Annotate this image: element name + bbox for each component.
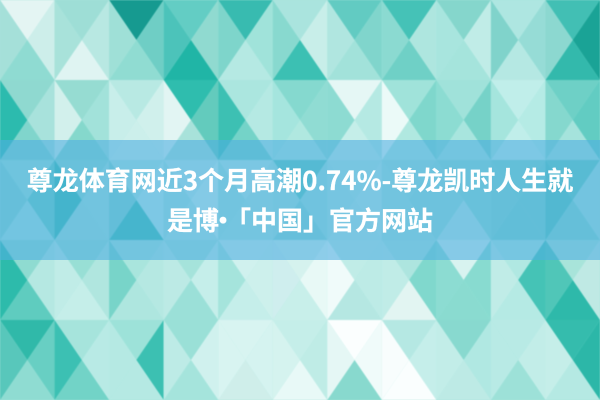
title	[27, 161, 573, 238]
title: 尊龙体育网近3个月高潮0.74%-尊龙凯时人生就	[27, 161, 573, 198]
title: 是博·「中国」官方网站	[167, 201, 433, 238]
title band: translucent blue strip	[0, 140, 600, 260]
